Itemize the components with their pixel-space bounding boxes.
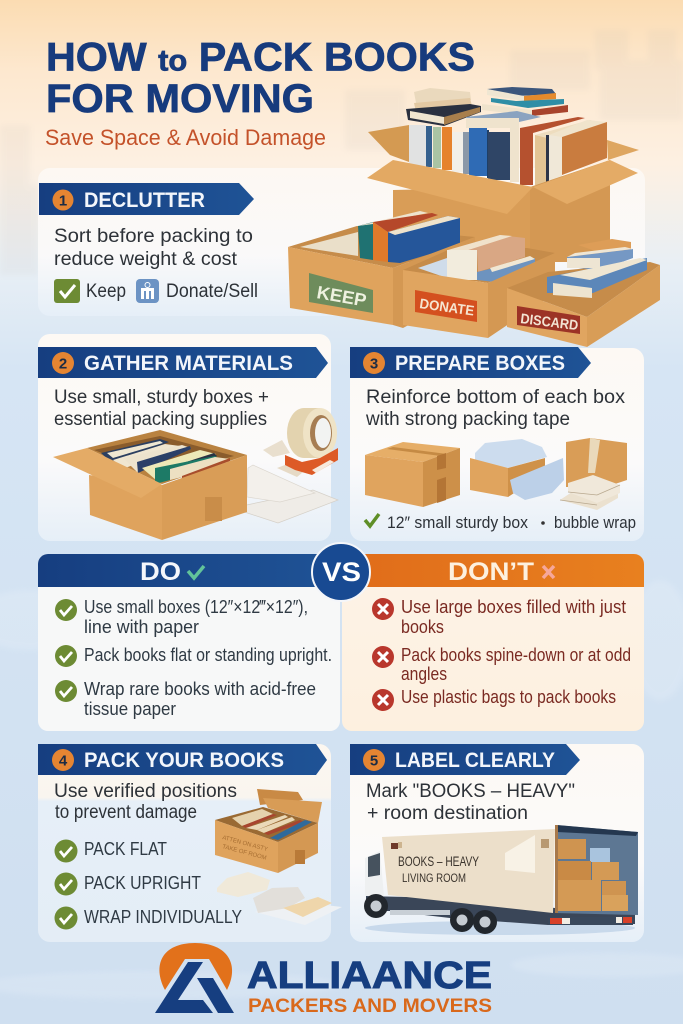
- wrap individually: [54, 906, 242, 930]
- icon: box with books: TAKE OF ROOM: [221, 844, 267, 862]
- panel: do: [38, 554, 340, 731]
- gather text: essential packing supplies: [54, 409, 267, 430]
- supplies caption: bubble wrap: [554, 514, 636, 532]
- panel: pack your books: [38, 744, 342, 942]
- declutter text: Sort before packing to: [54, 226, 253, 247]
- truck chassis: [366, 896, 635, 925]
- icon: packing paper: [232, 465, 338, 523]
- icon: box with bubble wrap: [470, 439, 564, 500]
- cargo side: [382, 829, 555, 913]
- step 1 header: [39, 183, 254, 215]
- do header: [38, 554, 340, 587]
- icon: moving truck: [364, 825, 638, 935]
- standing books: [409, 111, 607, 185]
- title: HOW to PACK BOOKS: [46, 36, 475, 80]
- pack text: Use verified positions: [54, 781, 237, 802]
- donate label: DONATE: [419, 295, 475, 319]
- cargo interior: [555, 825, 638, 915]
- panel: prepare boxes: [350, 347, 644, 541]
- icon: box with books: ATTEN ON ASTY: [221, 835, 268, 853]
- gather text: [54, 387, 269, 430]
- pack upright: PACK UPRIGHT: [84, 873, 201, 893]
- pack flat: PACK FLAT: [84, 839, 167, 859]
- prepare text: Reinforce bottom of each box: [366, 387, 626, 408]
- step 5 header: 5: [370, 752, 378, 770]
- don't item 2: [372, 645, 631, 684]
- books in box: [101, 439, 230, 484]
- truck cab: [365, 851, 384, 898]
- keep and donate key: Donate/Sell: [166, 281, 258, 302]
- step 2 header: 2: [59, 356, 67, 372]
- do item 3: Wrap rare books with acid-free: [84, 679, 316, 699]
- label text: [366, 781, 575, 824]
- step 1 header: 1: [59, 192, 67, 210]
- donate box: [403, 235, 555, 338]
- don't header: DON’T: [448, 558, 534, 586]
- step 4 header: PACK YOUR BOOKS: [84, 749, 284, 772]
- don't item 1: [372, 597, 626, 637]
- supplies caption: [365, 514, 636, 532]
- declutter text: reduce weight & cost: [54, 249, 238, 270]
- keep and donate key: Keep: [86, 281, 126, 302]
- don't item 2: angles: [401, 664, 447, 684]
- step 4 header: [38, 744, 327, 775]
- do header: DO: [140, 558, 181, 586]
- panel: declutter: [38, 168, 645, 316]
- discard box: [507, 239, 660, 347]
- panel: gather materials: [38, 334, 338, 541]
- illustration: large box of books and sorted boxes: [288, 87, 660, 347]
- truck side writing: LIVING ROOM: [402, 871, 466, 885]
- do item 1: line with paper: [84, 617, 199, 637]
- truck side writing: BOOKS – HEAVY: [398, 853, 479, 869]
- do item 2: Pack books flat or standing upright.: [84, 645, 332, 665]
- do item 3: [55, 679, 316, 719]
- prepare text: [365, 387, 626, 430]
- don't item 1: books: [401, 617, 444, 637]
- truck shadow: [365, 921, 635, 935]
- subtitle: Save Space & Avoid Damage: [45, 125, 326, 150]
- icon: open box with books: [53, 430, 247, 540]
- don't item 3: Use plastic bags to pack books: [401, 687, 616, 707]
- logo wordmark: ALLIAANCE: [247, 955, 492, 997]
- icon: wrapped books: [217, 872, 342, 925]
- logo mark: [155, 943, 234, 1013]
- don't item 3: [372, 687, 616, 711]
- label text: + room destination: [367, 803, 528, 824]
- icon: box with books: [215, 789, 322, 873]
- prepare text: with strong packing tape: [365, 409, 570, 430]
- title: [46, 36, 475, 121]
- don't item 1: Use large boxes filled with just: [401, 597, 626, 617]
- keep and donate key: [54, 279, 258, 303]
- pack upright: [54, 872, 201, 896]
- pack flat: [54, 839, 167, 862]
- wrap individually: WRAP INDIVIDUALLY: [84, 907, 242, 927]
- pack text: [54, 781, 237, 823]
- declutter text: [54, 226, 253, 270]
- step 5 header: LABEL CLEARLY: [395, 749, 555, 772]
- main box: [367, 87, 639, 262]
- wheels: [364, 894, 497, 934]
- VS badge: [312, 543, 370, 601]
- stacked books on top: [406, 87, 568, 126]
- step 3 header: [350, 347, 591, 378]
- step 5 header: [350, 744, 580, 775]
- title: FOR MOVING: [46, 77, 314, 121]
- step 3 header: 3: [370, 356, 378, 372]
- don't header: [342, 554, 644, 587]
- truck side writing: [398, 853, 479, 885]
- icon: small boxes: [560, 438, 627, 510]
- label text: Mark "BOOKS – HEAVY": [366, 781, 575, 802]
- supplies caption: 12″ small sturdy box: [387, 514, 529, 532]
- panel: don't: [342, 554, 644, 731]
- do item 3: tissue paper: [84, 699, 176, 719]
- logo: [155, 943, 492, 1017]
- gather text: Use small, sturdy boxes +: [54, 387, 269, 408]
- keep box: [288, 211, 475, 328]
- icon: taped box: [365, 442, 460, 507]
- step 2 header: GATHER MATERIALS: [84, 352, 293, 375]
- logo tagline: PACKERS AND MOVERS: [248, 995, 492, 1017]
- donate label: [415, 290, 477, 322]
- keep label: [309, 273, 373, 313]
- step 4 header: 4: [59, 752, 68, 770]
- pack text: to prevent damage: [55, 802, 197, 823]
- step 1 header: DECLUTTER: [84, 189, 205, 212]
- don't item 2: Pack books spine-down or at odd: [401, 645, 631, 665]
- VS badge: VS: [322, 557, 361, 587]
- discard label: DISCARD: [520, 310, 579, 333]
- do item 1: Use small boxes (12″×12‴×12″),: [84, 597, 308, 617]
- do item 1: [55, 597, 308, 637]
- step 2 header: [38, 347, 328, 378]
- step 3 header: PREPARE BOXES: [395, 352, 565, 375]
- keep label: KEEP: [315, 282, 368, 311]
- panel: label clearly: [350, 744, 644, 942]
- icon: tape dispenser: [263, 408, 338, 477]
